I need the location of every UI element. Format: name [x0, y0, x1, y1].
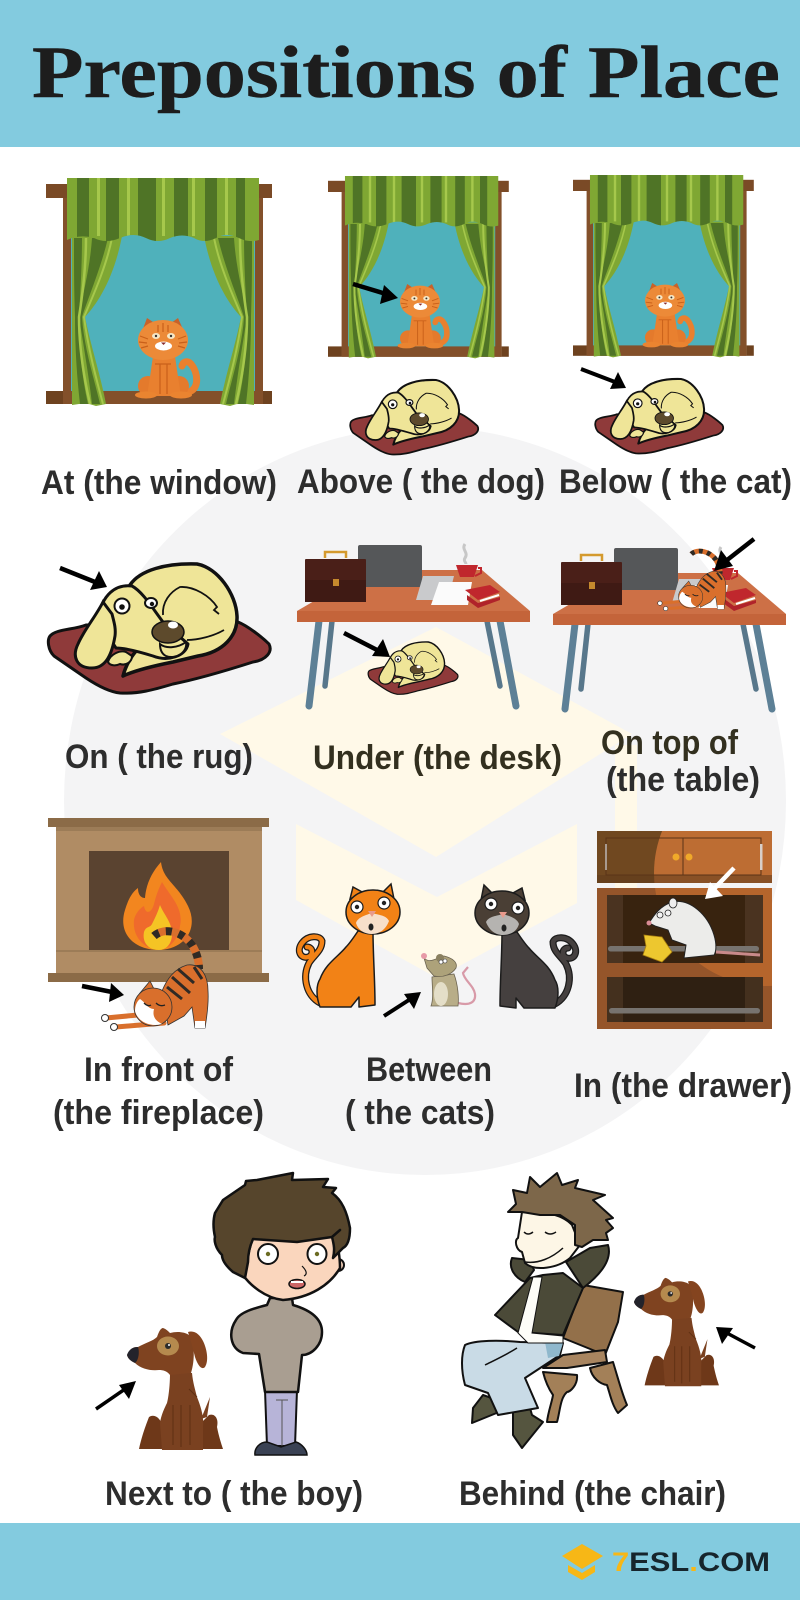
arrow	[344, 633, 390, 657]
icon: stretching cat	[102, 931, 208, 1030]
label: on top of the table: (the table)	[606, 761, 760, 799]
panel: at the window	[41, 178, 277, 502]
panel: next to the boy	[96, 1173, 363, 1513]
label: between the cats	[345, 1051, 495, 1132]
arrow	[60, 568, 107, 590]
label: in front of the fireplace: (the fireplace)	[53, 1094, 264, 1132]
illustration: window with cat	[328, 176, 509, 358]
icon: white mouse with cheese	[643, 898, 760, 962]
panel: on the rug	[48, 564, 270, 776]
icon: dog on rug	[48, 564, 270, 693]
illustration: fireplace	[48, 818, 269, 982]
title: Prepositions of Place	[32, 32, 780, 114]
arrow	[353, 284, 398, 304]
label: in front of the fireplace	[53, 1051, 264, 1132]
icon: brown dog	[634, 1278, 719, 1386]
panel: behind the chair	[459, 1173, 755, 1513]
panel: under the desk	[297, 544, 562, 777]
panel: above the dog	[297, 176, 545, 501]
arrow	[716, 1327, 755, 1348]
label: under the desk: Under (the desk)	[313, 739, 562, 777]
footer band	[0, 1523, 800, 1600]
label: above the dog: Above ( the dog)	[297, 463, 545, 501]
panel: in the drawer	[574, 831, 792, 1105]
illustration: desk	[553, 547, 786, 709]
label: in front of the fireplace: In front of	[84, 1051, 234, 1089]
icon: orange cat	[299, 884, 400, 1007]
header band	[0, 0, 800, 147]
arrow	[714, 539, 754, 571]
illustration: window with cat	[573, 175, 754, 357]
panel: between the cats	[299, 884, 576, 1132]
arrow	[581, 369, 626, 389]
icon: brown dog	[127, 1328, 223, 1450]
arrow	[96, 1381, 136, 1409]
background watermark	[64, 427, 786, 1175]
arrow	[384, 992, 421, 1016]
label: between the cats: ( the cats)	[345, 1094, 495, 1132]
label: next to the boy: Next to ( the boy)	[105, 1475, 363, 1513]
label: at the window: At (the window)	[41, 464, 277, 502]
icon: mouse	[421, 953, 475, 1006]
label: on top of the table	[601, 724, 760, 799]
illustration: chair	[543, 1285, 627, 1422]
label: on top of the table: On top of	[601, 724, 739, 762]
arrow	[82, 983, 124, 1002]
label: between the cats: Between	[366, 1051, 492, 1089]
label: on the rug: On ( the rug)	[65, 738, 253, 776]
arrow	[705, 868, 734, 899]
icon: dog on rug	[595, 379, 723, 454]
panel: on top of the table	[553, 539, 786, 799]
logo: 7ESL.COM	[562, 1544, 770, 1580]
icon: dog on rug	[350, 380, 478, 455]
panel: in front of the fireplace	[48, 818, 269, 1132]
logo text: 7ESL .COM	[612, 1547, 770, 1577]
illustration: cabinet with drawers	[597, 831, 772, 1029]
illustration: boy	[214, 1173, 350, 1455]
illustration: desk	[297, 544, 530, 706]
illustration: relaxing man	[462, 1173, 613, 1448]
label: behind the chair: Behind (the chair)	[459, 1475, 726, 1513]
illustration: window with cat	[46, 178, 272, 406]
icon: black cat	[475, 885, 576, 1008]
icon: dog on rug	[368, 642, 458, 694]
icon: cat on table	[658, 551, 726, 611]
icon: graduation cap	[562, 1544, 603, 1580]
panel: below the cat	[559, 175, 792, 501]
